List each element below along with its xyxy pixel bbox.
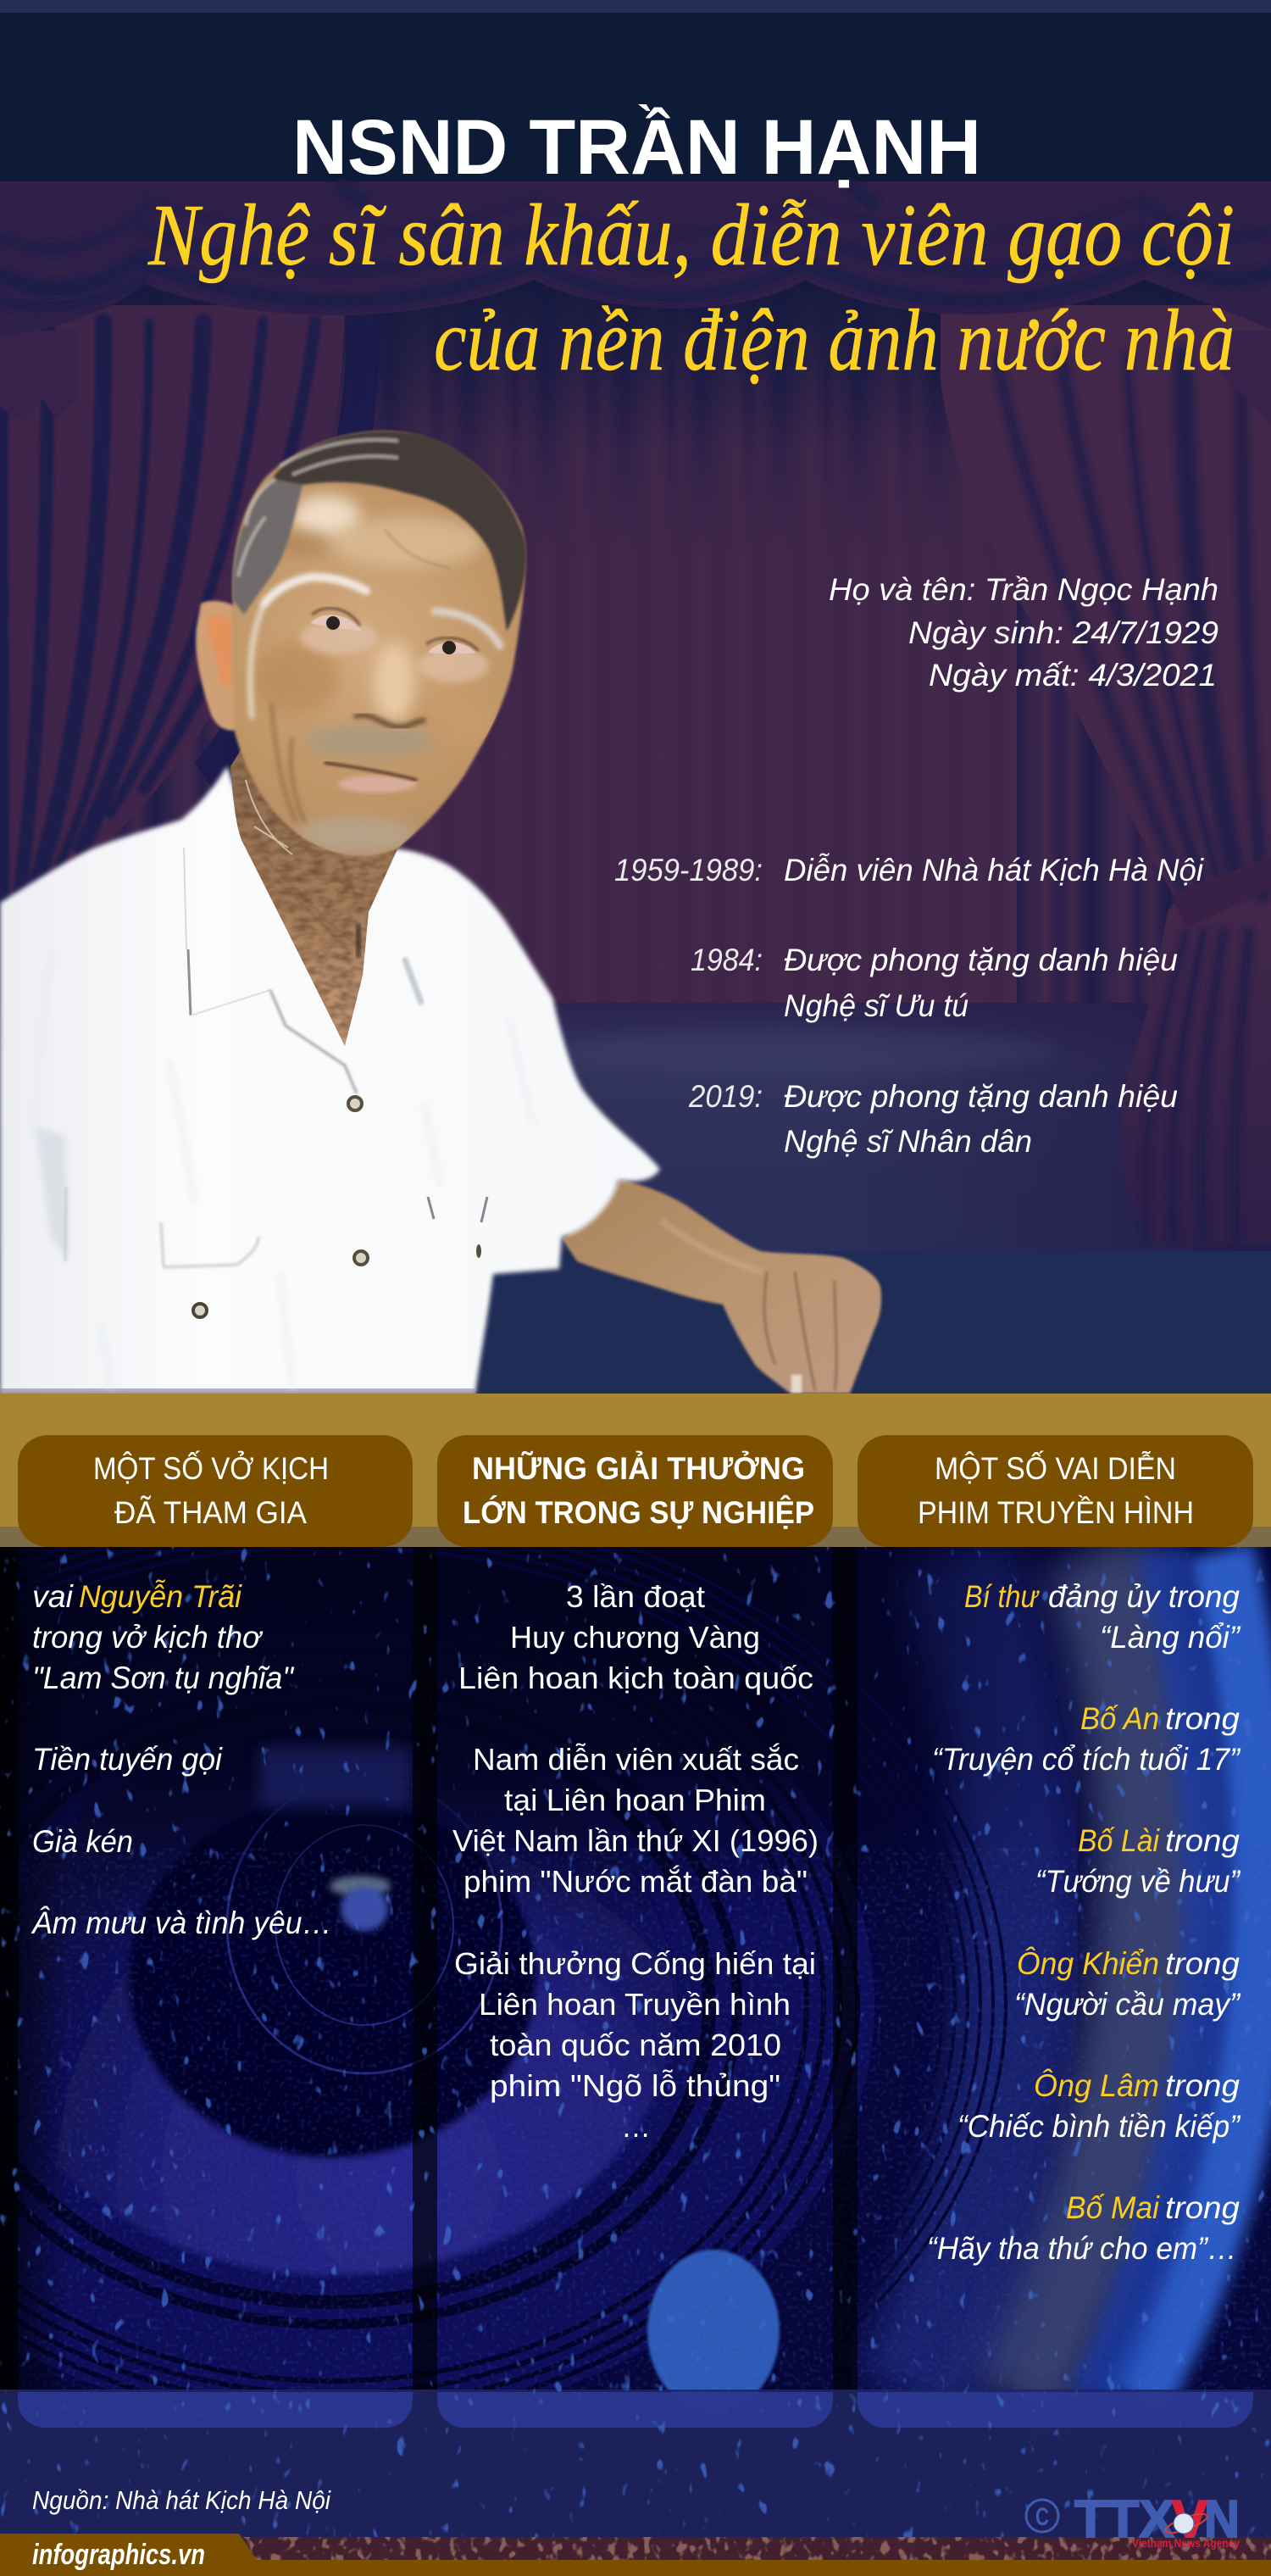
header pill: TV roles	[858, 1435, 1253, 1547]
lens top shading	[0, 1547, 1102, 1920]
stage floor	[0, 1003, 1271, 1394]
stage backdrop	[0, 280, 1211, 1003]
personal details: Ngày sinh: 24/7/1929	[908, 615, 1218, 650]
column text: plays	[31, 1579, 332, 1940]
agency logo: TTX	[1074, 2490, 1174, 2549]
column text: TV roles: Bố Mai	[1066, 2190, 1161, 2225]
column text: TV roles: “Hãy tha thứ cho em”…	[927, 2231, 1237, 2266]
column text: awards: tại Liên hoan Phim	[504, 1783, 766, 1817]
column text: plays: trong vở kịch thơ	[32, 1620, 264, 1655]
column text: awards: Việt Nam lần thứ XI (1996)	[452, 1823, 819, 1858]
header pill: plays	[18, 1435, 413, 1547]
gold band	[0, 1394, 1271, 1547]
header pill: awards: LỚN TRONG SỰ NGHIỆP	[463, 1494, 814, 1530]
column text: TV roles	[927, 1579, 1241, 2266]
career timeline	[614, 853, 1205, 1159]
agency logo	[1026, 2490, 1240, 2550]
column text: plays: "Lam Sơn tụ nghĩa"	[32, 1661, 295, 1695]
column text: awards: Liên hoan Truyền hình	[479, 1987, 791, 2022]
personal details: Ngày mất: 4/3/2021	[929, 658, 1217, 693]
column text: TV roles: “Làng nổi”	[1100, 1620, 1241, 1655]
column text: TV roles: trong	[1165, 2068, 1240, 2103]
column text: TV roles: “Truyện cổ tích tuổi 17”	[932, 1742, 1241, 1777]
column text: awards: Liên hoan kịch toàn quốc	[458, 1661, 813, 1695]
agency logo: Vietnam News Agency	[1132, 2536, 1240, 2550]
personal details	[829, 572, 1218, 693]
column text: TV roles: Ông Khiển	[1017, 1946, 1159, 1981]
subtitle	[147, 186, 1235, 389]
arm and hand	[562, 1179, 881, 1394]
website tab: infographics.vn	[32, 2539, 205, 2571]
column text: plays: vai	[32, 1579, 75, 1614]
column text: TV roles: trong	[1165, 1823, 1240, 1858]
career timeline: 1984:	[691, 943, 763, 977]
portrait photo of the actor	[0, 431, 881, 1394]
column text: TV roles: “Chiếc bình tiền kiếp”	[957, 2109, 1241, 2144]
blue bokeh blob	[647, 2250, 780, 2412]
column text: plays: Âm mưu và tình yêu…	[31, 1906, 332, 1940]
concentric lens rings	[18, 1778, 876, 2390]
column text: awards: toàn quốc năm 2010	[490, 2028, 781, 2062]
face	[231, 431, 525, 856]
website tab	[0, 2534, 257, 2576]
column text: awards: Giải thưởng Cống hiến tại	[454, 1946, 816, 1981]
header pill: TV roles: MỘT SỐ VAI DIỄN	[935, 1450, 1176, 1486]
mouth	[325, 763, 416, 793]
column text: awards: Huy chương Vàng	[510, 1620, 760, 1655]
header pill: plays: ĐÃ THAM GIA	[114, 1495, 307, 1530]
column text: TV roles: trong	[1165, 2190, 1240, 2225]
column text: TV roles: “Người cầu may”	[1014, 1987, 1241, 2022]
nose	[356, 715, 424, 727]
agency logo: N	[1204, 2490, 1240, 2549]
header pill: awards	[437, 1435, 833, 1547]
left curtain	[0, 305, 381, 899]
header pill: awards: NHỮNG GIẢI THƯỞNG	[472, 1450, 805, 1486]
side darkening	[0, 1547, 61, 2390]
column text: plays: Già kén	[32, 1824, 133, 1859]
agency logo: C	[1035, 2503, 1049, 2531]
star speckles	[0, 1547, 1271, 2537]
footer strip	[0, 2537, 1271, 2576]
neck	[230, 729, 465, 1046]
column text: TV roles: đảng ủy trong	[1048, 1579, 1240, 1614]
lens reflections	[259, 1747, 412, 1931]
eyes	[310, 609, 479, 654]
fine rings at lower right	[18, 1547, 1007, 2324]
column text: awards: phim "Ngõ lỗ thủng"	[490, 2068, 780, 2103]
column text: TV roles: Bố Lài	[1078, 1823, 1161, 1858]
career timeline: 1959-1989:	[614, 853, 763, 887]
curtain valance swags	[0, 181, 1271, 336]
personal details: Họ và tên: Trần Ngọc Hạnh	[829, 572, 1218, 607]
header pill: plays: MỘT SỐ VỞ KỊCH	[93, 1450, 329, 1486]
dark column gaps	[0, 1547, 858, 2395]
bright blue streaks	[907, 1551, 1261, 2399]
column text: TV roles: Bí thư	[964, 1579, 1040, 1614]
column text: awards: phim "Nước mắt đàn bà"	[463, 1864, 808, 1899]
header pill: TV roles: PHIM TRUYỀN HÌNH	[918, 1495, 1194, 1530]
ear	[196, 601, 242, 731]
agency logo: V	[1172, 2490, 1207, 2549]
eyebrows and side highlight	[250, 577, 500, 716]
career timeline: Nghệ sĩ Nhân dân	[784, 1124, 1032, 1159]
fine grain	[0, 1848, 1271, 2390]
column text: awards	[452, 1579, 819, 2144]
column text: TV roles: trong	[1165, 1946, 1240, 1981]
career timeline: Diễn viên Nhà hát Kịch Hà Nội	[784, 853, 1205, 887]
bottom navy overlay	[0, 2390, 1271, 2537]
column text: TV roles: Ông Lâm	[1034, 2068, 1159, 2103]
right curtain	[941, 305, 1271, 1246]
column text: awards: 3 lần đoạt	[566, 1579, 705, 1614]
column text: plays: Tiền tuyến gọi	[32, 1742, 224, 1777]
career timeline: Được phong tặng danh hiệu	[784, 1079, 1178, 1114]
career timeline: 2019:	[688, 1079, 763, 1114]
career timeline: Nghệ sĩ Ưu tú	[784, 988, 969, 1023]
column text: awards: …	[621, 2109, 651, 2144]
hair	[233, 431, 526, 631]
column text: TV roles: trong	[1165, 1701, 1240, 1736]
title: NSND TRẦN HẠNH	[292, 103, 981, 191]
lens background	[0, 1495, 1271, 2537]
column text: TV roles: “Tướng về hưu”	[1035, 1864, 1241, 1899]
translucent column bases	[18, 2392, 1253, 2428]
white shirt	[0, 766, 660, 1394]
column text: plays: Nguyễn Trãi	[79, 1579, 243, 1614]
career timeline: Được phong tặng danh hiệu	[784, 943, 1178, 977]
column text: TV roles: Bố An	[1080, 1701, 1159, 1736]
source note: Nguồn: Nhà hát Kịch Hà Nội	[32, 2485, 331, 2515]
column text: awards: Nam diễn viên xuất sắc	[473, 1742, 799, 1777]
